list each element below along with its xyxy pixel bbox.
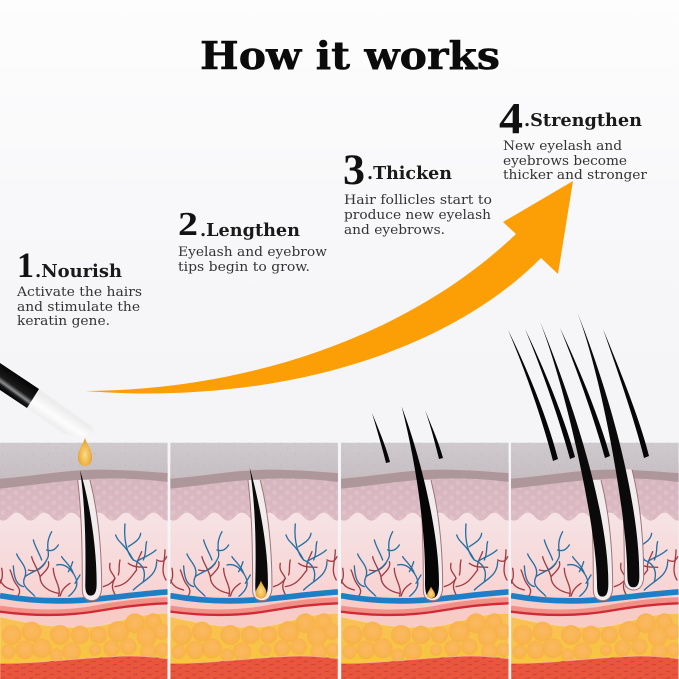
step 3: Thicken: 3 <box>343 147 365 194</box>
step 2: Lengthen: tips begin to grow. <box>178 260 310 275</box>
step 3: Thicken: and eyebrows. <box>344 223 445 238</box>
step 4: Strengthen <box>499 94 648 183</box>
short hairs: stage 4 <box>508 328 649 461</box>
step 1: Nourish: 1 <box>17 245 34 285</box>
step 4: Strengthen: New eyelash and <box>503 139 622 154</box>
step 1: Nourish: keratin gene. <box>17 314 110 329</box>
panel: stage 3 skin cross-section <box>324 407 529 679</box>
step 4: Strengthen: .Strengthen <box>524 110 642 131</box>
step 1: Nourish <box>16 245 142 329</box>
growth arrow <box>85 181 573 393</box>
panel: stage 2 skin cross-section <box>153 443 358 679</box>
step 2: Lengthen: 2 <box>178 206 198 243</box>
step 2: Lengthen: Eyelash and eyebrow <box>178 245 327 260</box>
step 3: Thicken: .Thicken <box>367 163 452 184</box>
icon: applicator brush <box>0 363 93 436</box>
step 4: Strengthen: thicker and stronger <box>503 168 648 183</box>
panel: stage 1 skin cross-section <box>0 443 188 679</box>
step 1: Nourish: and stimulate the <box>17 300 140 315</box>
step 3: Thicken: produce new eyelash <box>344 208 492 223</box>
step 3: Thicken <box>343 147 492 238</box>
icon: serum drop <box>78 438 92 466</box>
step 2: Lengthen <box>178 206 327 275</box>
step 2: Lengthen: .Lengthen <box>200 220 300 241</box>
step 1: Nourish: Activate the hairs <box>16 285 142 300</box>
panel: stage 4 skin cross-section <box>494 313 679 679</box>
step 1: Nourish: .Nourish <box>35 261 122 282</box>
title: How it works <box>200 33 500 78</box>
short hairs: stage 3 <box>372 410 443 463</box>
step 4: Strengthen: eyebrows become <box>503 154 627 169</box>
step 4: Strengthen: 4 <box>499 94 523 143</box>
step 3: Thicken: Hair follicles start to <box>344 193 492 208</box>
